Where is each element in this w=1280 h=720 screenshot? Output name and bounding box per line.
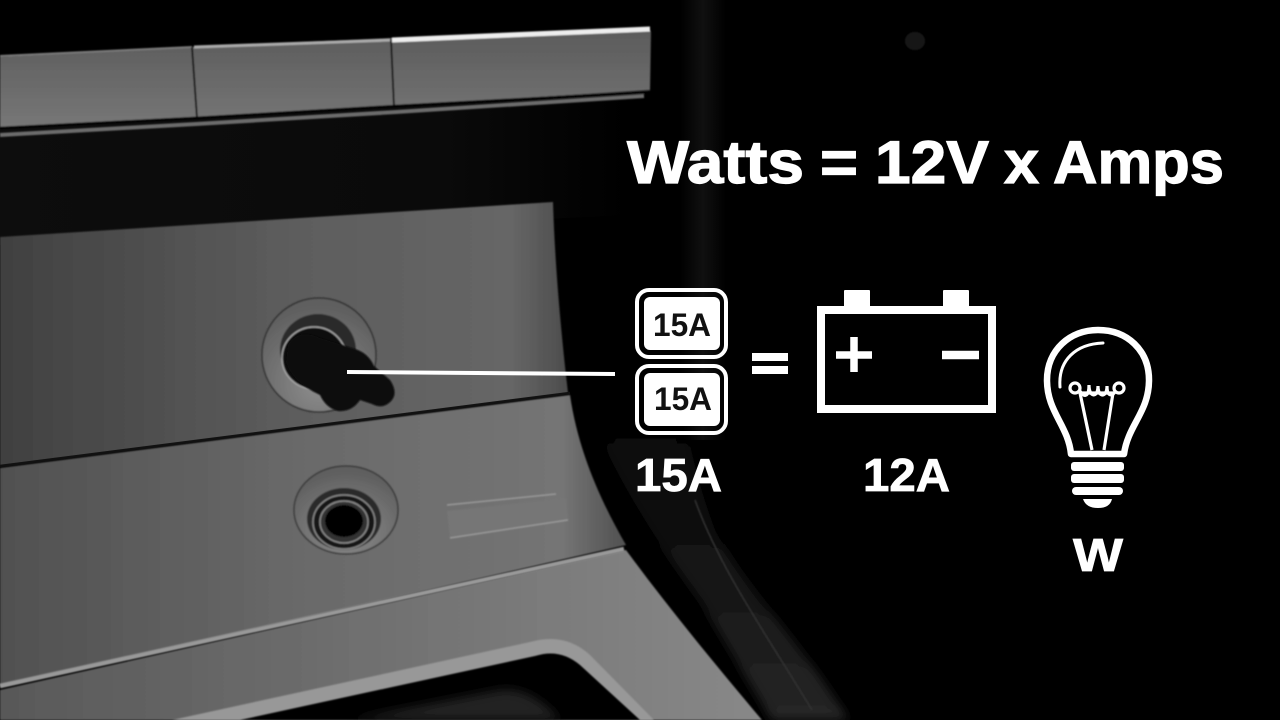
title: 12V (875, 129, 989, 196)
upper trim strip (0, 27, 651, 135)
title: Watts (627, 129, 804, 196)
lower panel (0, 395, 626, 687)
dashboard photo (0, 0, 925, 720)
steering column (565, 330, 848, 720)
trim top highlight (0, 47, 192, 56)
main panel with socket (0, 202, 568, 466)
plus sign (836, 337, 872, 372)
vent marking (447, 494, 568, 538)
title: x (1004, 129, 1039, 196)
minus sign (942, 351, 979, 359)
icon: battery (821, 290, 992, 409)
icon: light bulb (1047, 330, 1149, 508)
bottom console (0, 550, 762, 720)
label: 15A: 15A (635, 449, 722, 501)
plug in socket (286, 334, 395, 411)
dash shadow area (0, 90, 630, 245)
label: 12A: 12A (863, 449, 950, 501)
equals sign (752, 353, 788, 374)
panel seam (0, 393, 570, 466)
callout line from plug to fuses (347, 372, 615, 374)
title: = (820, 129, 858, 196)
icon: upper fuse: 15A (653, 307, 711, 343)
label: W: W (1073, 529, 1124, 581)
title: Amps (1053, 129, 1224, 196)
column highlight streak (695, 500, 812, 710)
title (627, 129, 1224, 196)
upper socket (262, 298, 376, 412)
console opening rim (172, 639, 654, 720)
icon: upper fuse (637, 290, 726, 357)
icon: lower fuse (637, 366, 726, 433)
faint vertical dash band (680, 0, 726, 440)
console inner tray (350, 690, 560, 720)
icon: lower fuse: 15A (654, 381, 712, 417)
trim dividers (192, 39, 394, 118)
background knob (905, 32, 925, 50)
console chrome strip (0, 549, 624, 686)
lower socket (294, 466, 398, 554)
trim lower shadow and lip (0, 92, 650, 128)
console opening (240, 653, 640, 720)
